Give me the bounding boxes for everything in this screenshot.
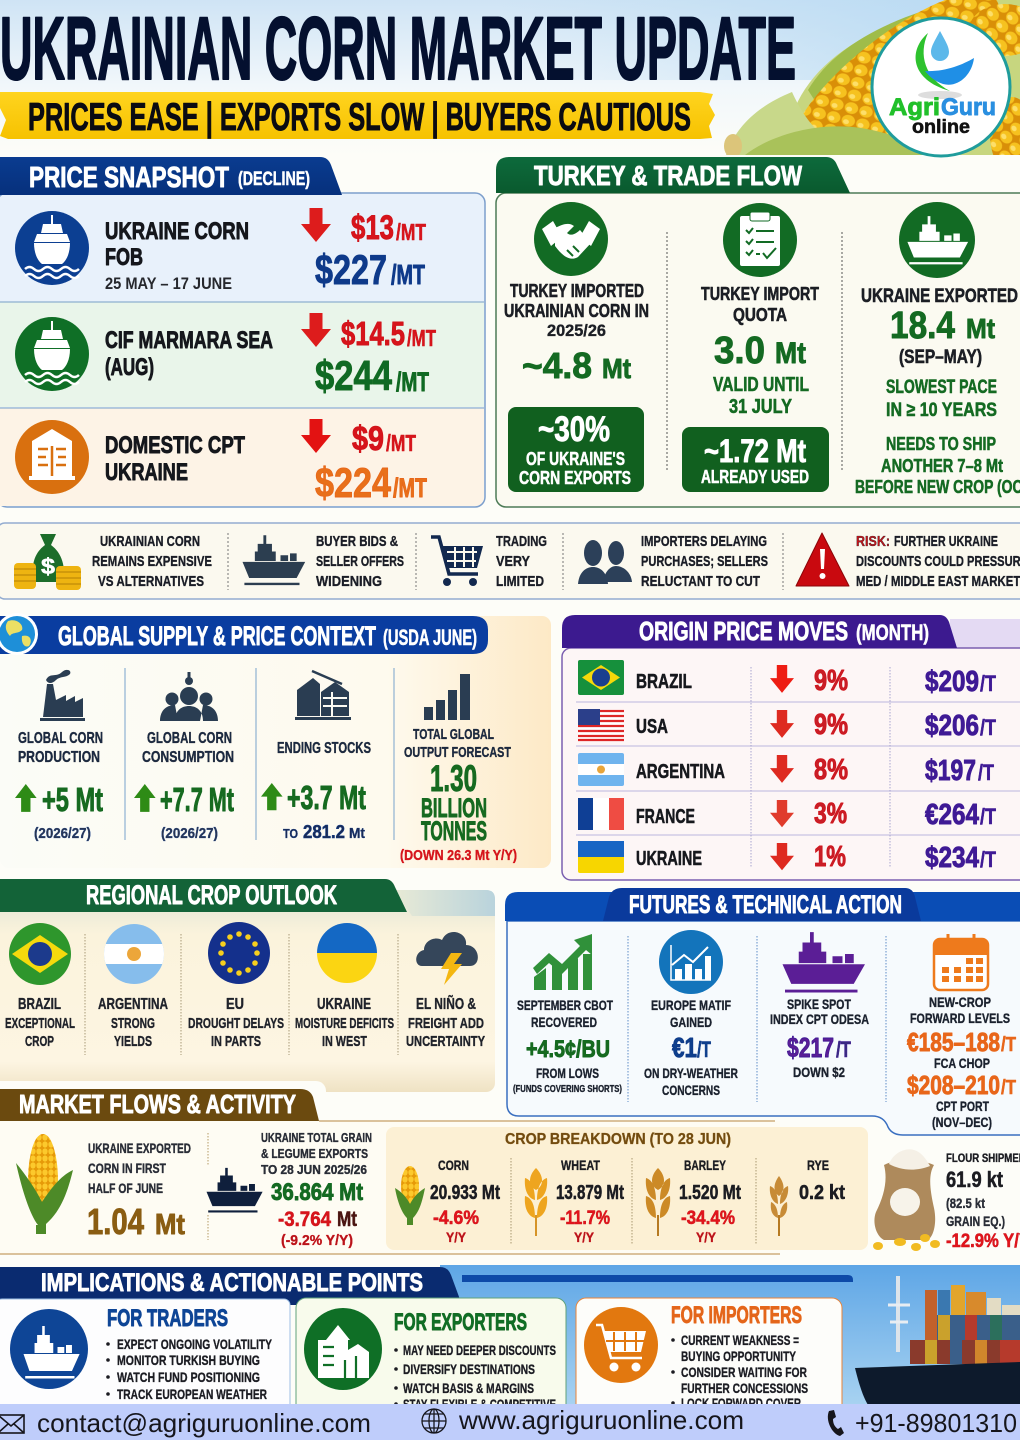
row: France: /T bbox=[980, 804, 996, 829]
text: remains expensive: REMAINS EXPENSIVE bbox=[92, 553, 212, 570]
item: Argentina: ARGENTINA bbox=[98, 996, 168, 1013]
card: for traders: FOR TRADERS bbox=[107, 1305, 228, 1332]
item: Ukraine: MOISTURE DEFICITS bbox=[295, 1015, 394, 1032]
column: Turkey imports: Mt bbox=[602, 353, 631, 384]
heading tab: (DECLINE) bbox=[238, 169, 310, 190]
column: import quota: ALREADY USED bbox=[701, 467, 809, 487]
column: import quota: QUOTA bbox=[733, 305, 787, 325]
stat: production bbox=[15, 670, 103, 842]
heading tab bbox=[0, 157, 342, 195]
stat: production: +5 Mt bbox=[42, 781, 103, 818]
rye bbox=[770, 1158, 845, 1236]
item: spike spot: $217 bbox=[787, 1032, 834, 1063]
panel: origin price moves bbox=[562, 615, 1020, 880]
card: for exporters: DIVERSIFY DESTINATIONS bbox=[403, 1361, 535, 1377]
crop breakdown box bbox=[386, 1127, 868, 1250]
heading pill: GLOBAL SUPPLY & PRICE CONTEXT bbox=[58, 621, 376, 651]
panel: Turkey and trade flow bbox=[496, 157, 1020, 507]
item: CBOT: +4.5¢/BU bbox=[526, 1036, 610, 1063]
item: Brazil: EXCEPTIONAL bbox=[5, 1015, 75, 1032]
corn export stat bbox=[16, 1134, 191, 1242]
text: remains expensive: VS ALTERNATIVES bbox=[98, 573, 204, 590]
row: Ukraine bbox=[578, 841, 996, 874]
row: Ukraine: UKRAINE bbox=[636, 848, 702, 870]
item: forward levels: /T bbox=[1001, 1077, 1016, 1099]
footer contact bar: www.agriguruonline.com bbox=[458, 1405, 744, 1435]
row: Argentina: 8% bbox=[814, 754, 848, 786]
item: forward levels: /T bbox=[1001, 1034, 1016, 1056]
logo: Guru bbox=[941, 94, 996, 121]
card: for exporters: FOR EXPORTERS bbox=[394, 1309, 527, 1336]
stat: ending stocks: Mt bbox=[349, 825, 365, 842]
wheat: 13.879 Mt bbox=[556, 1182, 624, 1204]
stat: total output forecast bbox=[400, 674, 517, 864]
panel: regional crop outlook bbox=[0, 879, 495, 1092]
row: Ukraine corn FOB: $227 bbox=[315, 246, 387, 293]
heading tab: IMPLICATIONS & ACTIONABLE POINTS bbox=[41, 1269, 423, 1297]
column: import quota: 3.0 bbox=[714, 330, 765, 372]
item: Argentina bbox=[98, 924, 168, 1050]
row: Brazil bbox=[578, 660, 996, 698]
corn export stat: HALF OF JUNE bbox=[88, 1181, 163, 1196]
panel: price snapshot bbox=[0, 157, 485, 507]
item: MATIF: EUROPE MATIF bbox=[651, 997, 731, 1013]
panel: implications and actionable points bbox=[0, 1265, 1020, 1419]
logo: online bbox=[912, 117, 970, 138]
card: for traders bbox=[0, 1299, 290, 1419]
text: bids and offers: SELLER OFFERS bbox=[316, 553, 404, 570]
row: France: €264 bbox=[925, 799, 979, 831]
card: for traders: TRACK EUROPEAN WEATHER bbox=[117, 1386, 267, 1402]
card: for importers: CURRENT WEAKNESS = bbox=[681, 1332, 799, 1348]
row: domestic CPT Ukraine: $9 bbox=[352, 420, 384, 458]
heading tab bbox=[0, 879, 407, 912]
card: for importers: BUYING OPPORTUNITY bbox=[681, 1348, 796, 1364]
barley: Y/Y bbox=[696, 1229, 717, 1245]
item: MATIF: €1 bbox=[672, 1032, 697, 1063]
row: Ukraine corn FOB: 25 MAY – 17 JUNE bbox=[105, 274, 232, 293]
text: remains expensive: UKRAINIAN CORN bbox=[100, 533, 200, 550]
corn export stat: 1.04 bbox=[87, 1201, 144, 1242]
item: MATIF: CONCERNS bbox=[662, 1082, 720, 1098]
item: forward levels: (NOV–DEC) bbox=[932, 1114, 992, 1130]
card: for importers: LOCK FORWARD COVER bbox=[681, 1395, 801, 1411]
row: domestic CPT Ukraine: DOMESTIC CPT bbox=[105, 432, 245, 459]
column: Turkey imports: 2025/26 bbox=[547, 321, 606, 340]
item: El Nino: FREIGHT ADD bbox=[408, 1015, 484, 1032]
text: importers delaying: RELUCTANT TO CUT bbox=[641, 573, 760, 590]
row: USA bbox=[578, 709, 996, 742]
row: USA: USA bbox=[636, 716, 668, 738]
item: MATIF bbox=[644, 930, 738, 1098]
card: for exporters bbox=[296, 1298, 566, 1418]
footer contact bar: contact@agriguruonline.com bbox=[37, 1408, 371, 1438]
heading tab bbox=[0, 1267, 462, 1305]
total grain exports stat: Mt bbox=[337, 1208, 357, 1231]
panel background rows bbox=[0, 193, 485, 507]
item: El Nino bbox=[406, 932, 485, 1050]
row: Ukraine: /T bbox=[980, 847, 996, 872]
card: for exporters: STAY FLEXIBLE & COMPETITIVE bbox=[403, 1396, 556, 1412]
header image: sky and corn bbox=[0, 0, 1020, 155]
column: import quota: VALID UNTIL bbox=[713, 374, 809, 396]
heading pill: (USDA JUNE) bbox=[383, 625, 477, 650]
stat: production: PRODUCTION bbox=[18, 749, 100, 766]
column: Ukraine exported bbox=[855, 202, 1020, 497]
item: spike spot: /T bbox=[836, 1037, 851, 1062]
row: France bbox=[578, 798, 996, 831]
row: Ukraine: $234 bbox=[925, 842, 979, 874]
heading pill bbox=[0, 616, 488, 654]
wheat bbox=[525, 1158, 624, 1245]
row: CIF Marmara Sea: /MT bbox=[407, 325, 436, 351]
corn export stat: CORN IN FIRST bbox=[88, 1161, 167, 1176]
stat: ending stocks: 281.2 bbox=[303, 822, 345, 842]
row: CIF Marmara Sea: CIF MARMARA SEA bbox=[105, 327, 273, 354]
icon: flour sack bbox=[873, 1149, 940, 1251]
text: remains expensive bbox=[92, 533, 212, 590]
column: Turkey imports: ~4.8 bbox=[522, 345, 592, 386]
text: trading limited: VERY bbox=[496, 553, 530, 570]
item: Argentina: YIELDS bbox=[114, 1033, 152, 1050]
text: trading limited: LIMITED bbox=[496, 573, 544, 590]
stat: ending stocks: ENDING STOCKS bbox=[277, 740, 371, 757]
item: spike spot: DOWN $2 bbox=[793, 1064, 845, 1080]
row: domestic CPT Ukraine: $224 bbox=[315, 459, 392, 506]
stat: consumption bbox=[134, 672, 234, 842]
text: bids and offers: BUYER BIDS & bbox=[316, 533, 398, 550]
panel: futures and technical action bbox=[505, 888, 1020, 1135]
text: importers delaying: PURCHASES; SELLERS bbox=[641, 553, 768, 570]
column: import quota: 31 JULY bbox=[729, 396, 793, 418]
row: Ukraine corn FOB: FOB bbox=[105, 244, 143, 271]
row: CIF Marmara Sea: (AUG) bbox=[105, 354, 154, 381]
icon: globe bbox=[422, 1409, 446, 1433]
logo bbox=[872, 18, 1010, 156]
barley: BARLEY bbox=[684, 1158, 726, 1173]
column: import quota bbox=[682, 203, 829, 492]
row: France: 3% bbox=[814, 798, 847, 830]
row: CIF Marmara Sea: $244 bbox=[315, 352, 393, 399]
row: Argentina: ARGENTINA bbox=[636, 761, 725, 783]
icon: corn bbox=[16, 1134, 73, 1234]
column: import quota: ~1.72 Mt bbox=[704, 433, 806, 469]
row: Brazil: BRAZIL bbox=[636, 671, 692, 693]
item: CBOT: (FUNDS COVERING SHORTS) bbox=[513, 1084, 622, 1095]
column: import quota: TURKEY IMPORT bbox=[701, 284, 819, 304]
stat: ending stocks: +3.7 Mt bbox=[287, 779, 366, 816]
text: risk: RISK: bbox=[856, 533, 890, 550]
row: domestic CPT Ukraine: /MT bbox=[393, 473, 427, 503]
row: domestic CPT Ukraine bbox=[15, 419, 427, 506]
item: MATIF: /T bbox=[697, 1037, 711, 1062]
stat: total output forecast: TONNES bbox=[421, 816, 487, 846]
row: CIF Marmara Sea bbox=[15, 313, 436, 399]
row: Brazil: /T bbox=[980, 671, 996, 696]
item: Brazil bbox=[5, 923, 75, 1050]
market sentiment strip bbox=[0, 523, 1020, 599]
card: for importers: FURTHER CONCESSIONS bbox=[681, 1380, 808, 1396]
item: spike spot bbox=[770, 932, 869, 1080]
column: Ukraine exported: 18.4 bbox=[890, 305, 955, 347]
row: Ukraine: 1% bbox=[814, 841, 846, 873]
rye: 0.2 kt bbox=[799, 1182, 845, 1204]
column: Turkey imports: CORN EXPORTS bbox=[519, 468, 631, 488]
item: El Nino: EL NIÑO & bbox=[416, 993, 476, 1013]
card: for importers: FOR IMPORTERS bbox=[671, 1302, 802, 1329]
row: domestic CPT Ukraine: UKRAINE bbox=[105, 459, 188, 486]
column: import quota: Mt bbox=[775, 337, 806, 370]
card: for traders: MONITOR TURKISH BUYING bbox=[117, 1352, 260, 1368]
text: bids and offers: WIDENING bbox=[316, 573, 382, 590]
icon: envelope bbox=[0, 1415, 24, 1433]
heading tab: TURKEY & TRADE FLOW bbox=[534, 160, 802, 191]
icon: money bag: $ bbox=[41, 554, 55, 579]
column: Ukraine exported: Mt bbox=[966, 313, 995, 344]
row: Ukraine corn FOB: $13 bbox=[351, 209, 394, 247]
flour shipments: GRAIN EQ.) bbox=[946, 1214, 1005, 1229]
text: importers delaying bbox=[641, 533, 768, 590]
row: USA: 9% bbox=[814, 709, 848, 741]
text: importers delaying: IMPORTERS DELAYING bbox=[641, 533, 767, 550]
item: CBOT: FROM LOWS bbox=[536, 1065, 599, 1081]
column: Turkey imports bbox=[504, 202, 649, 492]
item: spike spot: INDEX CPT ODESA bbox=[770, 1011, 869, 1027]
card: for traders: WATCH FUND POSITIONING bbox=[117, 1369, 260, 1385]
card: for exporters: MAY NEED DEEPER DISCOUNTS bbox=[403, 1342, 556, 1358]
rye: RYE bbox=[807, 1158, 829, 1173]
column: Turkey imports: ~30% bbox=[538, 410, 610, 449]
flour shipments: (82.5 kt bbox=[946, 1196, 985, 1211]
panel: market flows and activity bbox=[0, 1081, 1020, 1254]
subtitle banner bbox=[0, 92, 715, 139]
barley bbox=[646, 1158, 741, 1245]
total grain exports stat bbox=[206, 1130, 372, 1249]
item: forward levels bbox=[907, 934, 1016, 1130]
total grain exports stat: UKRAINE TOTAL GRAIN bbox=[261, 1130, 372, 1145]
footer contact bar: +91-89801310 bbox=[855, 1408, 1017, 1438]
flour shipments bbox=[873, 1149, 1020, 1252]
item: Ukraine: IN WEST bbox=[322, 1033, 367, 1050]
row: Brazil: $209 bbox=[925, 666, 979, 698]
corn export stat: UKRAINE EXPORTED bbox=[88, 1141, 191, 1156]
row: Argentina bbox=[578, 753, 994, 787]
logo: Agri bbox=[889, 94, 940, 121]
footer contact bar bbox=[0, 1404, 1020, 1440]
stat: ending stocks: TO bbox=[283, 826, 298, 841]
icon: globe bbox=[0, 613, 38, 655]
cargo ship photo bbox=[855, 1276, 1020, 1405]
row: Argentina: $197 bbox=[925, 755, 976, 787]
column: Turkey imports: TURKEY IMPORTED bbox=[510, 281, 644, 301]
heading tab: (MONTH) bbox=[856, 620, 929, 645]
row: Ukraine corn FOB: /MT bbox=[391, 259, 425, 290]
icon: phone bbox=[828, 1410, 844, 1436]
sea and sky backdrop bbox=[440, 1265, 1020, 1408]
row: Argentina: /T bbox=[978, 760, 994, 785]
item: forward levels: €185–188 bbox=[907, 1027, 1000, 1057]
row: France: FRANCE bbox=[636, 806, 695, 828]
corn: CORN bbox=[438, 1158, 469, 1173]
crop breakdown box: CROP BREAKDOWN (TO 28 JUN) bbox=[505, 1131, 731, 1148]
item: forward levels: CPT PORT bbox=[936, 1098, 989, 1114]
total grain exports stat: & LEGUME EXPORTS bbox=[261, 1146, 368, 1161]
stat: total output forecast: 1.30 bbox=[430, 758, 477, 799]
row: CIF Marmara Sea: /MT bbox=[396, 367, 429, 397]
heading tab: PRICE SNAPSHOT bbox=[29, 162, 229, 194]
text: risk bbox=[856, 533, 1020, 590]
stat: ending stocks bbox=[261, 671, 371, 842]
row: domestic CPT Ukraine: /MT bbox=[386, 430, 416, 456]
item: forward levels: NEW-CROP bbox=[929, 994, 991, 1010]
wheat: Y/Y bbox=[574, 1229, 595, 1245]
card: for importers: CONSIDER WAITING FOR bbox=[681, 1364, 807, 1380]
item: forward levels: $208–210 bbox=[907, 1070, 1000, 1100]
card: for exporters: WATCH BASIS & MARGINS bbox=[403, 1380, 534, 1396]
item: MATIF: GAINED bbox=[670, 1014, 712, 1030]
column: Turkey imports: OF UKRAINE'S bbox=[526, 449, 625, 469]
item: spike spot: SPIKE SPOT bbox=[787, 996, 851, 1012]
card: for traders: EXPECT ONGOING VOLATILITY bbox=[117, 1336, 272, 1352]
heading band: FUTURES & TECHNICAL ACTION bbox=[629, 891, 902, 919]
row: USA: $206 bbox=[925, 710, 979, 742]
total grain exports stat: 36.864 Mt bbox=[271, 1179, 363, 1206]
barley: 1.520 Mt bbox=[679, 1182, 741, 1204]
corn bbox=[395, 1158, 500, 1245]
total grain exports stat: -3.764 bbox=[278, 1208, 331, 1231]
row: CIF Marmara Sea: $14.5 bbox=[341, 315, 405, 352]
corn: Y/Y bbox=[446, 1229, 467, 1245]
text: bids and offers bbox=[316, 533, 404, 590]
item: Ukraine bbox=[295, 923, 394, 1050]
stat: total output forecast: OUTPUT FORECAST bbox=[404, 745, 511, 761]
item: EU: IN PARTS bbox=[211, 1033, 261, 1050]
icon: money bag bbox=[14, 534, 81, 590]
heading band bbox=[505, 888, 1020, 921]
item: EU: DROUGHT DELAYS bbox=[188, 1015, 284, 1032]
panel: global supply and price context bbox=[0, 613, 551, 868]
item: forward levels: FCA CHOP bbox=[934, 1055, 990, 1071]
stat: production: (2026/27) bbox=[34, 825, 91, 842]
stat: production: GLOBAL CORN bbox=[18, 730, 103, 747]
item: El Nino: UNCERTAINTY bbox=[406, 1033, 485, 1050]
stat: consumption: GLOBAL CORN bbox=[147, 730, 232, 747]
card: for importers bbox=[576, 1298, 842, 1418]
row: Brazil: 9% bbox=[814, 665, 848, 697]
stat: consumption: +7.7 Mt bbox=[160, 781, 234, 818]
icon: ship bbox=[242, 535, 305, 585]
total grain exports stat: TO 28 JUN 2025/26 bbox=[261, 1162, 367, 1177]
stat: total output forecast: TOTAL GLOBAL bbox=[413, 727, 494, 743]
corn: 20.933 Mt bbox=[430, 1182, 500, 1204]
barley: -34.4% bbox=[681, 1208, 735, 1229]
stat: total output forecast: BILLION bbox=[421, 793, 487, 823]
heading tab: ORIGIN PRICE MOVES bbox=[639, 616, 848, 646]
corn: -4.6% bbox=[433, 1208, 479, 1229]
column: Ukraine exported: IN ≥ 10 YEARS bbox=[886, 400, 997, 421]
item: EU bbox=[188, 922, 284, 1050]
row: Ukraine corn FOB: /MT bbox=[396, 219, 426, 245]
item: MATIF: ON DRY-WEATHER bbox=[644, 1065, 738, 1081]
item: CBOT: RECOVERED bbox=[531, 1014, 597, 1030]
column: Turkey imports: UKRAINIAN CORN IN bbox=[504, 301, 649, 321]
stat: total output forecast: (DOWN 26.3 Mt Y/Y) bbox=[400, 848, 517, 864]
wheat: -11.7% bbox=[560, 1208, 610, 1229]
row: USA: /T bbox=[980, 715, 996, 740]
icon: people bbox=[578, 540, 632, 584]
item: EU: EU bbox=[226, 996, 244, 1013]
item: Argentina: STRONG bbox=[111, 1015, 155, 1032]
icon: warning triangle bbox=[796, 533, 849, 586]
item: Brazil: CROP bbox=[25, 1033, 54, 1050]
wheat: WHEAT bbox=[561, 1158, 601, 1173]
text: trading limited: TRADING bbox=[496, 533, 547, 550]
heading tab: MARKET FLOWS & ACTIVITY bbox=[19, 1089, 296, 1119]
flour shipments: 61.9 kt bbox=[946, 1167, 1004, 1192]
stat: consumption: CONSUMPTION bbox=[142, 749, 234, 766]
row: Ukraine corn FOB bbox=[15, 208, 426, 293]
item: Ukraine: UKRAINE bbox=[317, 996, 371, 1013]
item: CBOT bbox=[513, 934, 622, 1095]
item: CBOT: SEPTEMBER CBOT bbox=[517, 997, 613, 1013]
text: trading limited bbox=[496, 533, 547, 590]
stat: consumption: (2026/27) bbox=[161, 825, 218, 842]
heading tab bbox=[562, 615, 957, 648]
subtitle banner: PRICES EASE | EXPORTS SLOW | BUYERS CAUTIOUS bbox=[28, 96, 691, 139]
heading tab: REGIONAL CROP OUTLOOK bbox=[86, 880, 337, 910]
total grain exports stat: (-9.2% Y/Y) bbox=[281, 1232, 353, 1249]
corn export stat: Mt bbox=[155, 1209, 185, 1241]
row: Ukraine corn FOB: UKRAINE CORN bbox=[105, 218, 249, 245]
column: Ukraine exported: (SEP–MAY) bbox=[899, 347, 982, 368]
icon: cart bbox=[431, 537, 483, 586]
item: Brazil: BRAZIL bbox=[18, 996, 61, 1013]
